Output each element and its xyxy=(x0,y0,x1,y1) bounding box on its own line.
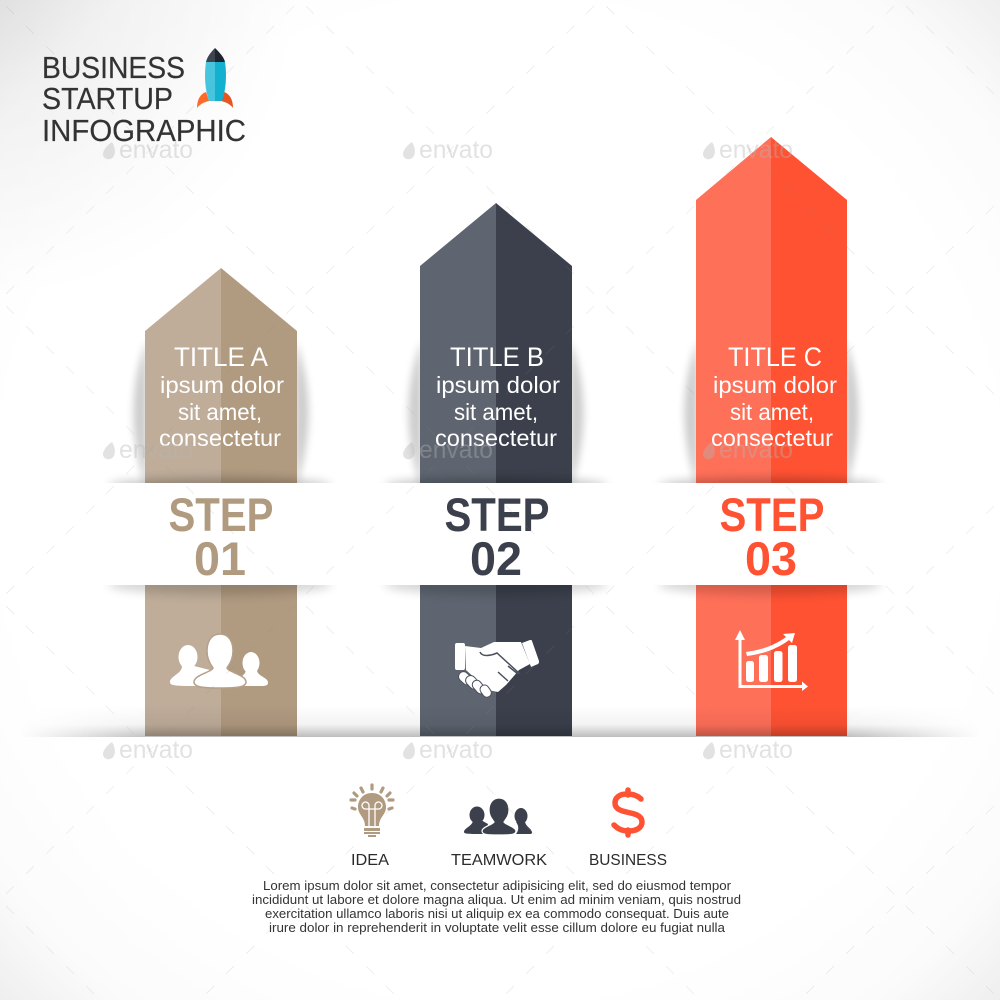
step 01: STEP xyxy=(168,488,274,541)
watermarks: envato xyxy=(103,136,793,764)
step 02: STEP xyxy=(444,488,550,541)
watermarks: envato: envato xyxy=(719,736,793,764)
step 01: 01 xyxy=(194,532,246,585)
icon: people xyxy=(170,634,268,688)
arrow B text: consectetur xyxy=(435,425,557,451)
watermarks: envato: envato xyxy=(719,136,793,164)
icon: handshake xyxy=(455,640,539,699)
title: INFOGRAPHIC xyxy=(42,113,246,148)
side shadows behind arrows xyxy=(134,340,858,490)
arrow C text xyxy=(711,342,837,451)
watermarks: envato: envato xyxy=(419,736,493,764)
step 01 xyxy=(168,488,274,585)
step 03 xyxy=(720,488,824,585)
title xyxy=(42,50,246,148)
arrow A text: ipsum dolor xyxy=(160,372,284,398)
icon: rocket xyxy=(197,48,233,108)
watermarks: envato: envato xyxy=(719,436,793,464)
icon: teamwork people xyxy=(464,798,532,835)
label: TEAMWORK: TEAMWORK xyxy=(451,852,547,869)
icon: light bulb xyxy=(351,785,393,837)
arrow C: red xyxy=(696,137,847,736)
watermarks: envato: envato xyxy=(119,736,193,764)
arrow B text: TITLE B xyxy=(450,342,544,372)
title: BUSINESS xyxy=(42,50,185,85)
paragraph: incididunt ut labore et dolore magna aliqua. Ut enim ad minim veniam, quis nostrud xyxy=(252,893,741,907)
arrow A: tan xyxy=(145,268,297,736)
watermarks: envato: envato xyxy=(119,136,193,164)
arrow A text: consectetur xyxy=(159,425,281,451)
arrow C text: ipsum dolor xyxy=(713,372,837,398)
step 03: STEP xyxy=(720,488,824,541)
watermarks: envato: envato xyxy=(119,436,193,464)
step 03: 03 xyxy=(745,532,797,585)
bottom shadow strip xyxy=(38,718,962,737)
step 02 xyxy=(444,488,550,585)
step 02: 02 xyxy=(470,532,522,585)
label: BUSINESS: BUSINESS xyxy=(589,852,667,869)
white step band xyxy=(0,483,1000,585)
paragraph: exercitation ullamco laboris nisi ut aliquip ex ea commodo consequat. Duis aute xyxy=(265,907,729,921)
arrow C text: sit amet, xyxy=(730,399,814,425)
icon: bar chart xyxy=(735,630,808,691)
icon: dollar xyxy=(614,790,642,835)
band shadow above xyxy=(109,473,881,483)
arrow C text: TITLE C xyxy=(728,342,822,372)
watermarks: envato: envato xyxy=(419,136,493,164)
band shadow below xyxy=(108,585,882,599)
arrow A text: sit amet, xyxy=(178,399,262,425)
paragraph xyxy=(252,879,741,935)
arrow B text xyxy=(435,342,560,451)
paragraph: irure dolor in reprehenderit in voluptate velit esse cillum dolore eu fugiat nulla xyxy=(269,921,725,935)
arrow C text: consectetur xyxy=(711,425,833,451)
arrow A text xyxy=(159,342,284,451)
arrow B text: sit amet, xyxy=(454,399,538,425)
paragraph: Lorem ipsum dolor sit amet, consectetur adipisicing elit, sed do eiusmod tempor xyxy=(263,879,731,893)
watermarks: envato: envato xyxy=(419,436,493,464)
arrow B text: ipsum dolor xyxy=(436,372,560,398)
label: IDEA: IDEA xyxy=(351,852,389,869)
title: STARTUP xyxy=(42,81,173,116)
arrow A text: TITLE A xyxy=(174,342,268,372)
arrow B: dark xyxy=(420,203,572,736)
